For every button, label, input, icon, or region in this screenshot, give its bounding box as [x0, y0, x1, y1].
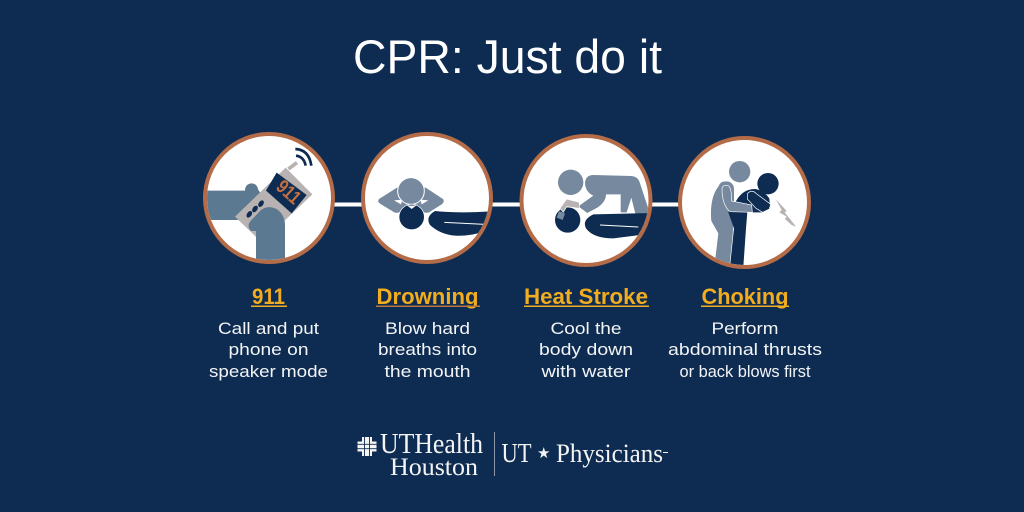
- icon: victim head: [555, 207, 580, 233]
- text block: Heat Stroke: with water: [540, 362, 631, 381]
- logo text: UT Physicians: UT: [502, 438, 532, 468]
- icon: 911 digits: 911: [272, 176, 305, 209]
- icon: holding hand: [207, 183, 260, 220]
- heading: Heat Stroke: Heat Stroke: [524, 284, 648, 309]
- panel: choking icon: [680, 138, 809, 267]
- icon: rescuer head: [398, 178, 424, 204]
- icon: rescuer body: [711, 181, 734, 267]
- icon: rescuer body: [578, 175, 650, 214]
- text block: Choking: or back blows first: [680, 362, 811, 381]
- text block: 911: phone on: [228, 340, 308, 359]
- text block: Heat Stroke: Cool the: [550, 319, 622, 338]
- logo: [358, 429, 668, 481]
- panel: drowning icon: [363, 134, 495, 262]
- text block: Drowning: Blow hard: [385, 319, 470, 338]
- logo: Physicians: [556, 438, 663, 468]
- icon: phone screen: [266, 173, 307, 213]
- panel: heat stroke icon: [522, 136, 653, 265]
- text block: Drowning: breaths into: [378, 340, 477, 359]
- icon: victim head: [757, 173, 779, 194]
- text block: 911: speaker mode: [209, 362, 328, 381]
- icon: signal waves: [295, 149, 311, 166]
- icon: logo cross: [358, 437, 376, 456]
- text block: Choking: abdominal thrusts: [668, 340, 822, 359]
- icon: rescuer head: [558, 170, 583, 195]
- text block: Choking: [668, 284, 822, 381]
- logo: ★: [537, 446, 550, 462]
- icon: rescuer arm: [722, 185, 752, 212]
- icon: phone antenna: [288, 163, 297, 169]
- text block: Choking: Perform: [712, 319, 778, 338]
- icon: victim head: [399, 204, 424, 230]
- text block: Heat Stroke: body down: [539, 340, 633, 359]
- heading: 911: 911: [252, 284, 285, 309]
- icon: victim body: [728, 189, 770, 267]
- icon: victim body: [585, 213, 653, 238]
- icon: phone body: [235, 168, 312, 242]
- icon: victim body: [428, 211, 495, 236]
- icon: thumb: [249, 207, 285, 265]
- icon: rescuer arms: [378, 188, 444, 213]
- icon: rescuer head: [729, 161, 750, 182]
- heading: Drowning: Drowning: [376, 284, 478, 309]
- logo: Houston: [390, 452, 478, 481]
- text block: 911: Call and put: [218, 319, 319, 338]
- heading: Choking: Choking: [702, 284, 788, 309]
- title: CPR: Just do it: [353, 30, 662, 83]
- logo text: UTHealth Houston: UTHealth: [380, 429, 483, 460]
- text block: Heat Stroke: [524, 284, 649, 381]
- icon: water: [560, 199, 579, 212]
- text block: 911: [209, 284, 328, 381]
- connector line: [330, 202, 685, 206]
- text block: Drowning: [376, 284, 480, 381]
- icon: cough burst: [776, 199, 796, 227]
- text block: Drowning: the mouth: [384, 362, 470, 381]
- icon: victim arm: [747, 191, 771, 212]
- icon: phone buttons: [246, 200, 264, 218]
- panel: 911 icon: [202, 134, 333, 265]
